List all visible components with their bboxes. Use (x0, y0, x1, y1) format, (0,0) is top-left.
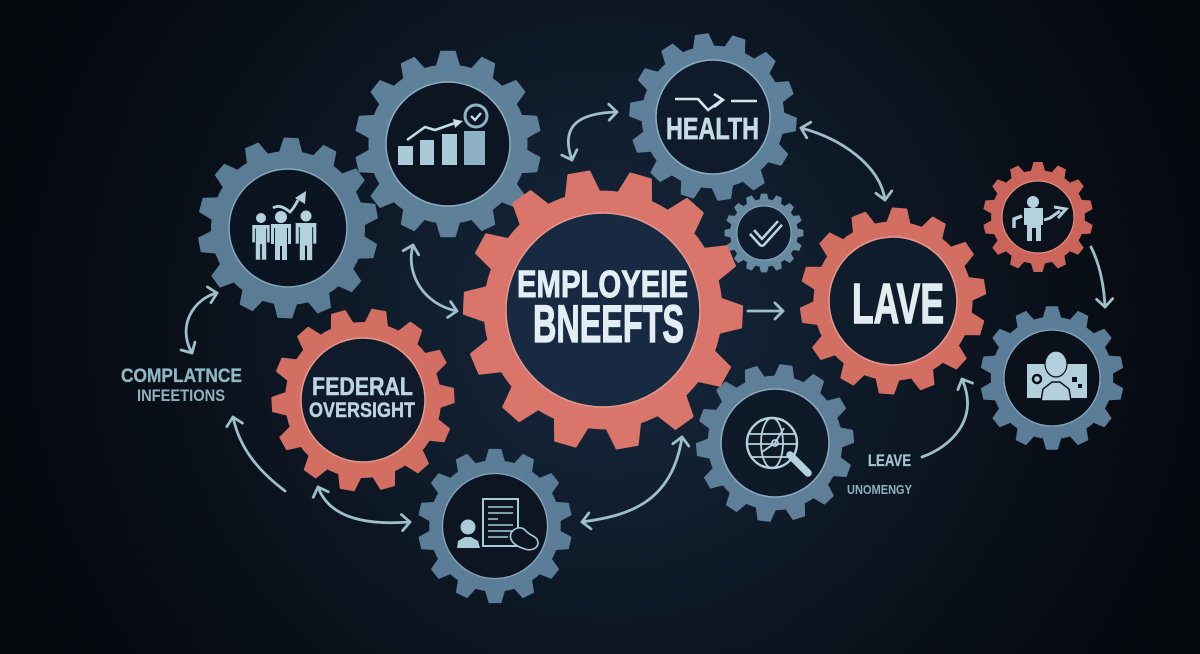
gear: employee benefits hub (432, 139, 774, 481)
gear: document (418, 450, 572, 602)
icon: person with screen (1027, 351, 1087, 401)
arrow: leave label to leave gear (922, 379, 967, 457)
text: federal: FEDERAL (312, 373, 413, 401)
arrow: top hub to health (568, 112, 617, 160)
gear: health (608, 12, 818, 222)
label: infections: INFEETIONS (137, 387, 225, 405)
arrow: health to leave (801, 128, 885, 200)
icon: globe with magnifier (747, 418, 808, 473)
text: employee: EMPLOYEIE (517, 264, 688, 306)
icon: people with growth arrow (252, 191, 316, 260)
gear: leave (794, 202, 992, 400)
gear: globe search (686, 355, 864, 531)
label: compliance: COMPLATNCE (121, 365, 242, 387)
arrow: document to globe (582, 437, 682, 522)
gear: check (725, 194, 803, 272)
arrow: federal to document (318, 487, 410, 523)
icon: bar chart with check badge (398, 105, 487, 165)
icon: person with arrows (1014, 196, 1066, 241)
text: lave: LAVE (852, 272, 944, 336)
gear: chart (355, 52, 541, 236)
icon: person, document and hand (457, 499, 538, 550)
gear: federal oversight (258, 295, 468, 505)
gear: consultant (981, 307, 1123, 449)
icon: pulse line (675, 94, 757, 110)
arrow: hub to leave (748, 310, 783, 312)
arrows (186, 112, 1105, 523)
arrow: compliance loop (233, 417, 285, 491)
label: unomengy: UNOMENGY (847, 483, 913, 497)
arrow: small gear to consultant gear (1091, 247, 1105, 307)
arrow: chart to hub (411, 245, 457, 311)
gear: people growth (195, 135, 381, 321)
arrow: people to compliance (186, 293, 217, 353)
text: oversight: OVERSIGHT (309, 398, 415, 422)
text: benefits: BNEEFTS (533, 295, 684, 354)
text: health: HEALTH (666, 111, 759, 146)
icon: check mark (752, 223, 780, 243)
gear: person direction (983, 162, 1093, 272)
label: leave: LEAVE (868, 452, 911, 470)
